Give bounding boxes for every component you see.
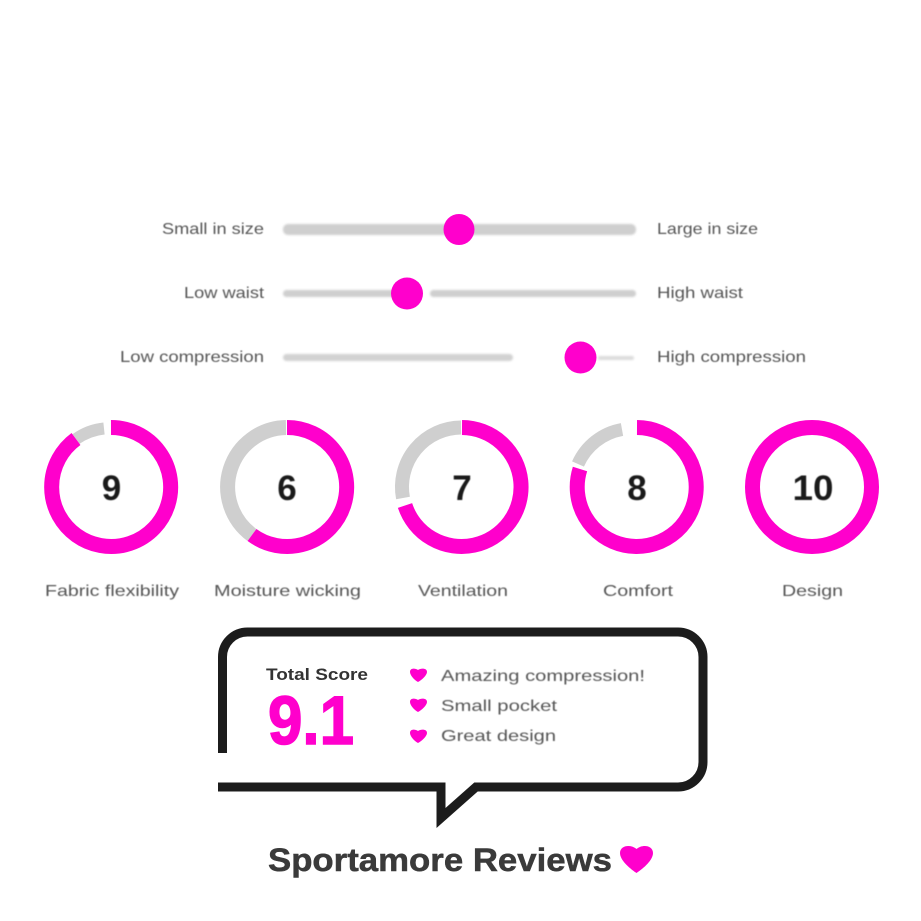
slider: waist	[184, 278, 744, 310]
ring: ventilation 7: 7	[452, 469, 472, 508]
review highlights	[410, 668, 645, 745]
slider: size	[162, 214, 758, 245]
total score: 9.1	[268, 682, 354, 759]
ring: design 10: Design	[782, 583, 843, 600]
slider: size: Small in size	[162, 221, 264, 238]
ring: moisture wicking 6: 6	[277, 469, 297, 508]
icon: heart	[410, 699, 427, 712]
icon: heart	[410, 669, 427, 682]
ring: fabric flexibility 9: Fabric flexibility	[45, 583, 179, 600]
highlight text: Small pocket	[441, 698, 558, 715]
icon: heart	[410, 730, 427, 743]
ring: ventilation 7: Ventilation	[418, 583, 508, 600]
ring: moisture wicking 6	[214, 427, 361, 600]
slider: compression	[120, 342, 806, 374]
ring: design 10: 10	[792, 469, 834, 508]
slider: size: Large in size	[657, 221, 758, 238]
bubble outline	[218, 632, 703, 818]
ring: ventilation 7	[402, 428, 521, 600]
slider: compression: Low compression	[120, 349, 264, 366]
ring: comfort 8	[577, 428, 696, 600]
ring: moisture wicking 6: Moisture wicking	[214, 583, 361, 600]
ring: comfort 8: 8	[627, 469, 647, 508]
brand footer: Sportamore Reviews	[268, 842, 612, 878]
panel: sliders	[120, 214, 806, 374]
highlight text: Amazing compression!	[441, 668, 645, 685]
ring: comfort 8: Comfort	[603, 583, 674, 600]
ring: fabric flexibility 9: 9	[102, 469, 121, 508]
highlight text: Great design	[441, 728, 556, 745]
panel: score rings	[45, 427, 872, 600]
icon: large heart	[620, 846, 653, 873]
slider: waist: High waist	[657, 285, 744, 302]
slider: compression: High compression	[657, 349, 806, 366]
ring: design 10	[752, 428, 872, 600]
total score: Total Score	[266, 665, 368, 684]
panel: speech bubble	[218, 632, 703, 818]
slider: waist: Low waist	[184, 285, 265, 302]
ring: fabric flexibility 9	[45, 427, 179, 600]
